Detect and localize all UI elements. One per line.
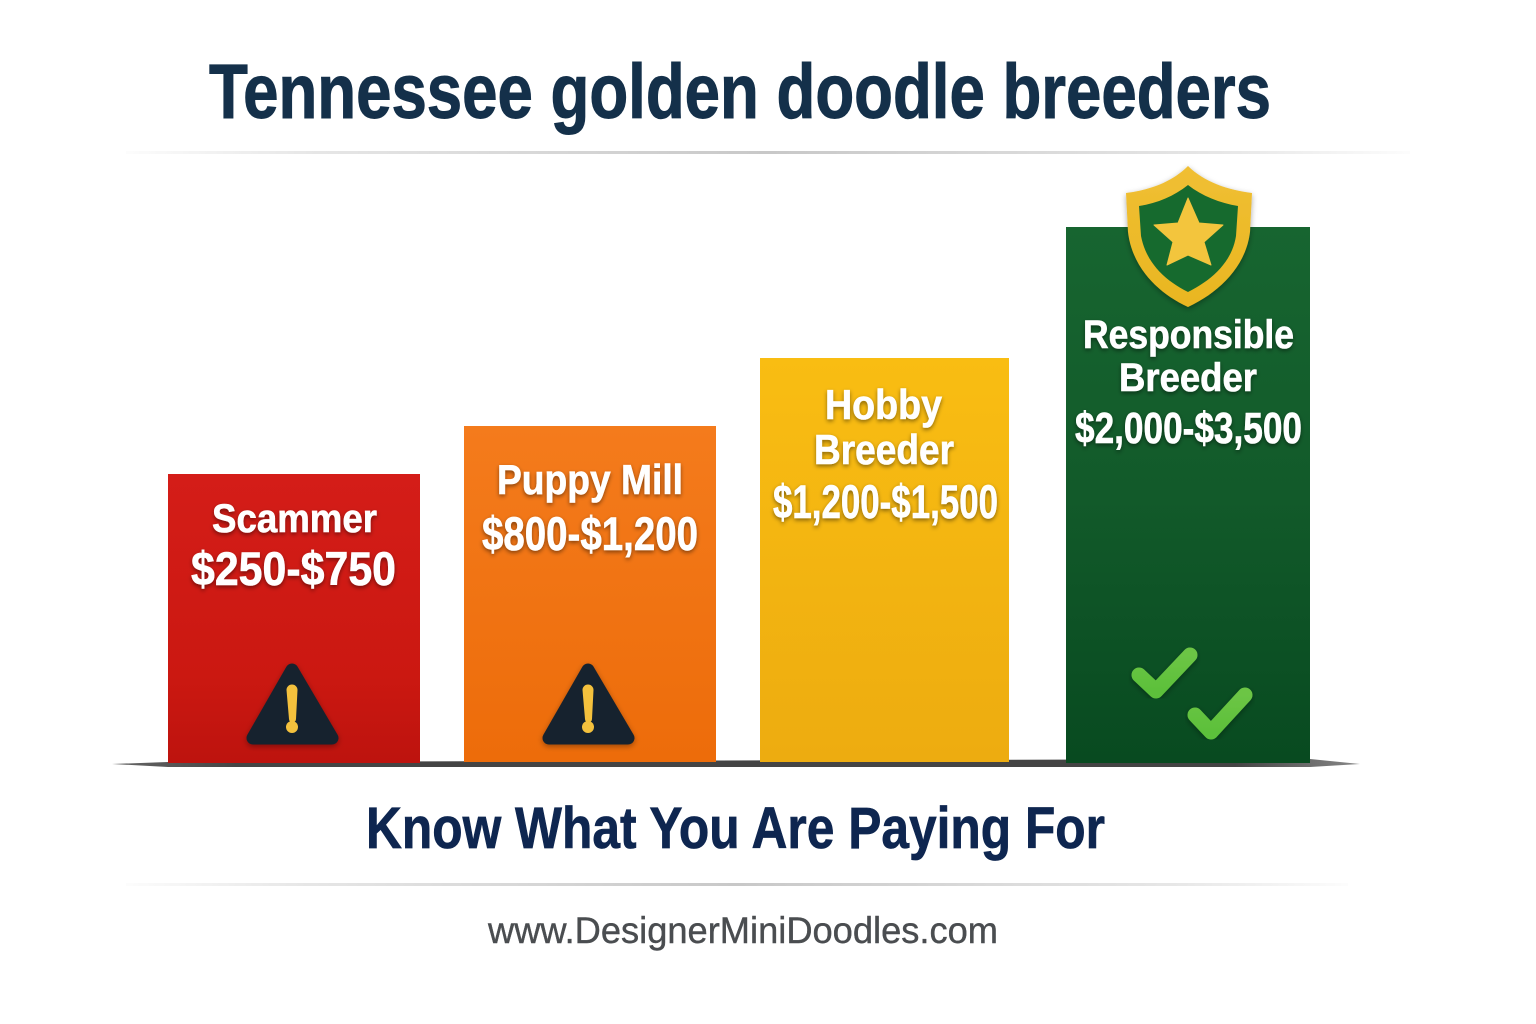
icon: warning triangle [549,670,628,738]
puppy mill price: $800-$1,200 [482,507,698,560]
baseline [112,759,1360,767]
responsible breeder label: Responsible [1083,313,1294,357]
bar: responsible breeder [1066,166,1310,763]
bar: scammer [168,474,420,763]
hobby breeder label: Hobby [825,381,943,428]
top divider [126,151,1410,154]
subheading: Know What You Are Paying For [366,796,1105,861]
hobby breeder label [814,381,954,473]
puppy mill label: Puppy Mill [497,456,683,503]
website: www.DesignerMiniDoodles.com [487,910,998,951]
hobby breeder price: $1,200-$1,500 [773,475,998,528]
responsible breeder label [1083,313,1294,400]
scammer price: $250-$750 [191,542,396,595]
icon: warning triangle [253,670,332,738]
bottom divider [126,883,1348,886]
title: Tennessee golden doodle breeders [209,49,1271,135]
responsible breeder price: $2,000-$3,500 [1075,404,1302,453]
responsible breeder label: Breeder [1119,356,1257,400]
scammer label: Scammer [212,497,377,541]
icon: shield with star [1126,166,1252,307]
icon: check mark [1139,655,1190,691]
bar: hobby breeder [760,358,1009,762]
bar: puppy mill [464,426,716,762]
icon: check mark [1195,695,1245,732]
hobby breeder label: Breeder [814,426,954,473]
